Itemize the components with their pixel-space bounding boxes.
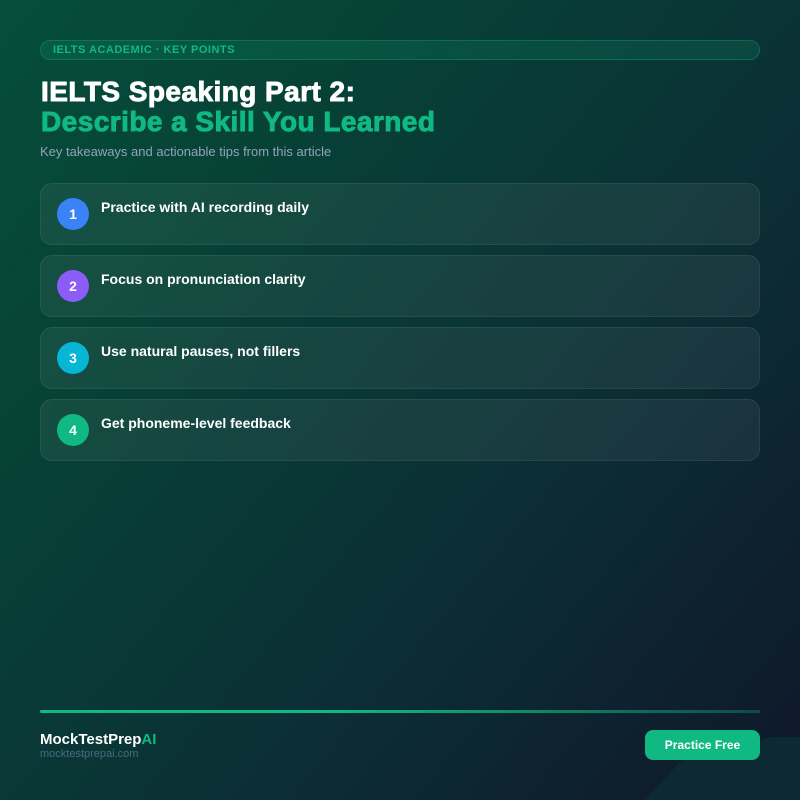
title [41,76,435,137]
text 2: Focus on pronunciation clarity [101,271,306,287]
number 3: 3 [69,350,77,366]
number 1: 1 [69,206,77,222]
card 4 [40,399,760,461]
title: Describe a Skill You Learned [41,106,435,137]
text 1: Practice with AI recording daily [101,199,309,215]
number 2 [57,270,89,302]
number 4: 4 [69,422,77,438]
number 4 [57,414,89,446]
number 2: 2 [69,278,77,294]
brand url: mocktestprepai.com [40,748,138,760]
number 1 [57,198,89,230]
title: IELTS Speaking Part 2: [41,76,355,107]
accent line [40,710,760,713]
badge [40,40,760,60]
badge: IELTS ACADEMIC · KEY POINTS [53,44,235,56]
card 2 [40,255,760,317]
card 3 [40,327,760,389]
text 4: Get phoneme-level feedback [101,415,291,431]
call to action button [645,730,760,760]
text 3: Use natural pauses, not fillers [101,343,300,359]
brand: MockTestPrepAI [40,731,156,748]
number 3 [57,342,89,374]
call to action button: Practice Free [665,738,740,752]
card 1 [40,183,760,245]
subtitle: Key takeaways and actionable tips from this article [40,144,331,159]
